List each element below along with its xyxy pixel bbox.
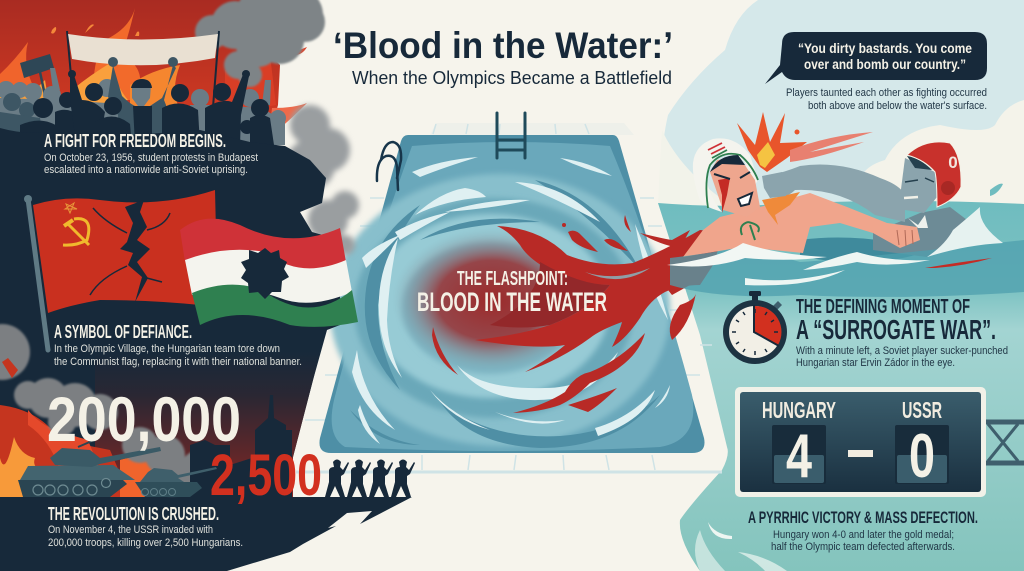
tank small — [135, 467, 217, 497]
blood in pool — [392, 215, 722, 413]
callout: over and bomb our country.” — [804, 57, 966, 72]
text: pyrrhic victory — [771, 529, 955, 553]
score card: hungary — [772, 422, 826, 491]
lower fire — [0, 405, 200, 497]
dark panel body — [0, 128, 412, 571]
pool basin — [319, 135, 704, 453]
text: symbol of defiance: the Communist flag, replacing it with their national banner. — [54, 356, 302, 368]
blood streams — [432, 215, 722, 413]
water fight scene — [667, 112, 1024, 297]
bullet hole — [241, 248, 289, 299]
text: defining moment — [796, 345, 1008, 369]
right water background — [658, 201, 1024, 571]
hungarian player cap — [693, 138, 758, 212]
pool handrail — [377, 142, 401, 190]
scoreboard — [735, 387, 986, 497]
text: revolution crushed: On November 4, the USSR invaded with — [48, 524, 213, 536]
flashpoint label: THE FLASHPOINT: — [457, 268, 568, 290]
soviet fist — [762, 172, 790, 198]
text: fight for freedom — [44, 152, 258, 176]
soviet player cap: 0 — [948, 153, 958, 172]
flashpoint label: BLOOD IN THE WATER — [417, 287, 607, 317]
heading: fight for freedom: A FIGHT FOR FREEDOM BEGINS. — [44, 131, 226, 151]
flames top — [0, 8, 307, 128]
text: revolution crushed: 200,000 troops, killing over 2,500 Hungarians. — [48, 537, 243, 549]
soldiers — [325, 460, 415, 497]
explosion — [737, 112, 873, 172]
soviet player cap — [907, 142, 961, 207]
stat: 200,000 troops: 200,000 — [47, 385, 241, 455]
smoke mid right — [285, 105, 359, 255]
text: symbol of defiance — [54, 343, 302, 368]
placard — [20, 54, 54, 105]
top fire background — [0, 0, 280, 135]
team: ussr: USSR — [902, 397, 942, 423]
text: defining moment: Hungarian star Ervin Zádor in the eye. — [796, 357, 955, 369]
hammer and sickle — [63, 203, 89, 245]
text: pyrrhic victory: half the Olympic team defected afterwards. — [771, 541, 955, 553]
water waves back — [800, 238, 930, 262]
tank large — [18, 441, 161, 497]
subtitle: When the Olympics Became a Battlefield — [352, 68, 672, 88]
score card: ussr — [895, 422, 949, 491]
score card: hungary: 4 — [786, 422, 812, 491]
hair, face blood and mouth — [710, 155, 759, 240]
text: symbol of defiance: In the Olympic Village, the Hungarian team tore down — [54, 343, 280, 355]
title: ‘Blood in the Water:’ — [333, 25, 673, 66]
crowd mid row — [0, 57, 178, 145]
flashpoint label — [417, 268, 607, 317]
water white swirls — [352, 157, 670, 444]
callout: “You dirty bastards. You come — [798, 41, 972, 56]
heading: defining moment — [796, 296, 996, 345]
heading: revolution crushed: THE REVOLUTION IS CRUSHED. — [48, 504, 219, 524]
soviet flag — [24, 190, 217, 350]
right lower foam crescents — [695, 522, 787, 571]
stat: 2,500 killed: 2,500 — [210, 443, 322, 508]
soviet player body — [873, 207, 968, 257]
callout note: Players taunted each other as fighting occurred — [786, 87, 987, 99]
team: hungary: HUNGARY — [762, 397, 836, 423]
callout note — [786, 87, 987, 112]
score dash — [848, 450, 873, 457]
hungarian flag — [180, 219, 358, 327]
water foreground — [667, 184, 1024, 297]
text: pyrrhic victory: Hungary won 4-0 and later the gold medal; — [773, 529, 954, 541]
hungarian fist — [897, 230, 913, 246]
callout note: both above and below the water's surface. — [808, 100, 987, 112]
smoke top right — [195, 0, 325, 87]
lower smoke — [0, 324, 220, 496]
soviet tie — [908, 215, 928, 228]
hungarian player body — [683, 193, 920, 257]
callout — [765, 32, 987, 84]
blood core — [392, 228, 592, 372]
text: fight for freedom: On October 23, 1956, student protests in Budapest — [44, 152, 258, 164]
soviet player arm — [767, 164, 905, 222]
impact — [762, 192, 800, 225]
skyline — [190, 395, 292, 497]
bridge — [986, 422, 1024, 463]
crowd back row — [0, 68, 286, 145]
pool ladder — [497, 113, 525, 158]
left dark panel — [0, 0, 412, 571]
pool — [319, 113, 704, 453]
soviet player head — [900, 156, 937, 213]
flagpole — [28, 199, 48, 350]
score card: ussr: 0 — [909, 422, 935, 491]
text: fight for freedom: escalated into a nationwide anti-Soviet uprising. — [44, 164, 248, 176]
lower red glow — [95, 352, 320, 497]
heading: symbol of defiance: A SYMBOL OF DEFIANCE. — [54, 322, 192, 342]
icon: stopwatch — [723, 291, 787, 364]
sky and clouds — [658, 0, 1024, 205]
crowd front row — [20, 70, 274, 145]
water whirl rings — [330, 174, 670, 446]
pool deck tiles — [296, 123, 722, 472]
water outer — [332, 142, 693, 451]
flag crack — [90, 200, 170, 302]
text: revolution crushed — [48, 524, 243, 549]
banner — [67, 31, 219, 120]
water dark swirl bands — [350, 180, 660, 448]
hungarian player face — [710, 158, 760, 217]
